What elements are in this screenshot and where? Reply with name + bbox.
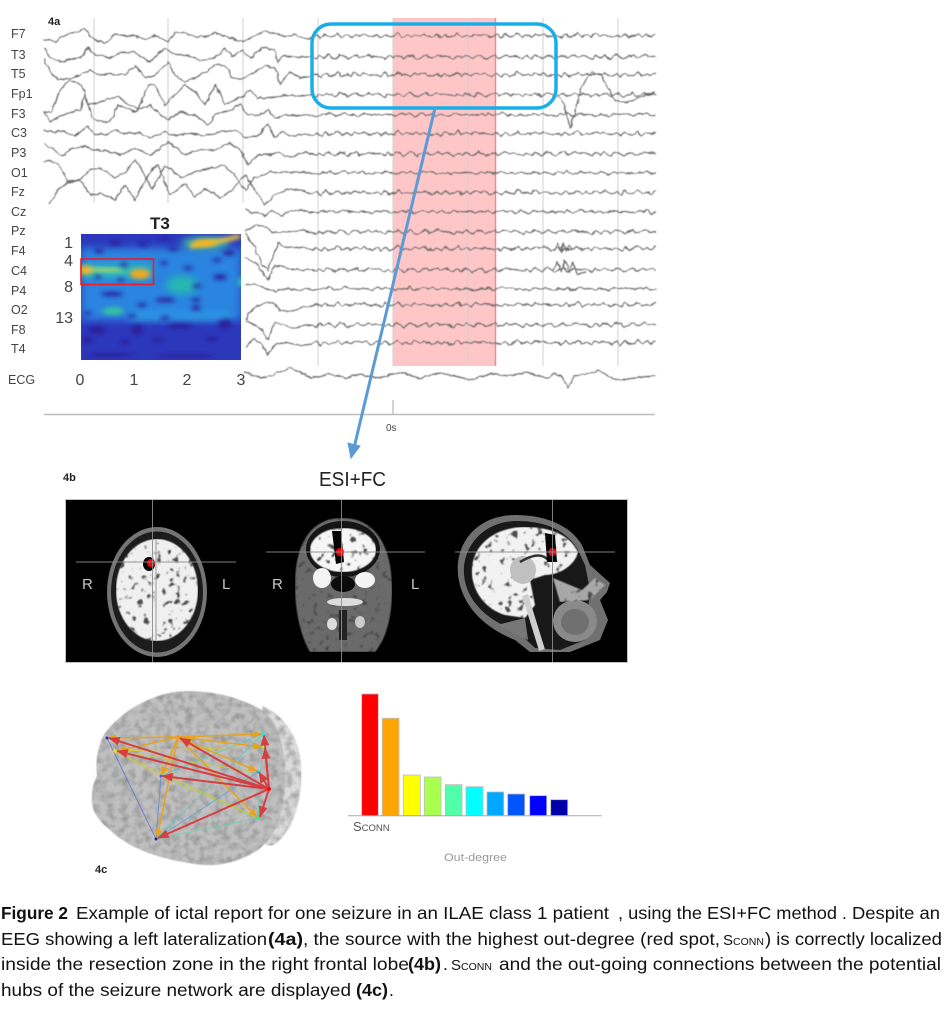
caption line 1: Despite an [852, 903, 940, 923]
panel heading ESI+FC: ESI+FC [319, 469, 386, 491]
heatmap x axis ticks: 1 [130, 372, 139, 389]
caption line 3: inside the resection zone in the right frontal lobe [1, 954, 409, 974]
heatmap x axis ticks: 2 [183, 372, 192, 389]
orientation letters: L [411, 576, 419, 593]
out-degree bar chart [348, 694, 602, 864]
heatmap y axis ticks: 13 [55, 310, 73, 327]
caption line 4: (4c) [356, 980, 388, 1000]
brain surface [262, 706, 301, 846]
chart baseline [348, 815, 602, 817]
panel 4c: brain network diagram [92, 691, 301, 876]
crosshair lines [76, 500, 615, 662]
channel labels: F3 [11, 107, 26, 121]
caption line 1 [1, 903, 940, 923]
channel labels [8, 27, 35, 387]
channel labels: O1 [11, 166, 28, 180]
channel labels: P4 [11, 284, 26, 298]
caption line 2: , the source with the highest out-degree (red spot, [303, 929, 720, 949]
axial slice [107, 527, 207, 657]
channel labels: Cz [11, 205, 26, 219]
red S-CONN outgoing arrows [109, 735, 269, 838]
source red spot [336, 548, 344, 556]
heatmap title: T3 [150, 214, 170, 233]
right channels [311, 32, 658, 348]
channel labels: Fp1 [11, 87, 33, 101]
channel labels: C3 [11, 126, 27, 140]
channel labels: T5 [11, 67, 26, 81]
channel labels: T3 [11, 48, 26, 62]
lesion [143, 557, 155, 571]
bars [362, 694, 568, 816]
caption line 2 [1, 929, 942, 949]
channel labels: F8 [11, 323, 26, 337]
caption line 2: EEG showing a left lateralization [1, 929, 267, 949]
band right edge [494, 18, 496, 366]
panel 4a: EEG recording [8, 16, 707, 434]
channel labels: ECG [8, 373, 35, 387]
caption line 4: . [389, 980, 394, 1000]
heatmap x axis ticks: 3 [237, 372, 246, 389]
heatmap y axis ticks: 8 [64, 279, 73, 296]
orange outgoing arrows [108, 734, 262, 838]
figure caption [1, 903, 942, 1000]
time axis: 0s [386, 423, 397, 434]
channel labels: C4 [11, 264, 27, 278]
caption line 3: SCONN [451, 957, 492, 974]
caption line 3: . [443, 954, 448, 974]
source red spot [147, 559, 155, 567]
channel labels: F7 [11, 27, 26, 41]
heatmap x axis ticks [76, 372, 246, 389]
network nodes [106, 732, 271, 840]
MRI black background [66, 500, 628, 662]
heatmap red selection box [81, 259, 154, 284]
orientation letters: R [82, 576, 93, 593]
panel label 4a: 4a [48, 16, 61, 28]
x axis title: Out-degree [444, 852, 507, 864]
channel labels: F4 [11, 244, 26, 258]
caption line 1: Figure 2 [1, 903, 68, 923]
panel 4b: MRI source localisation [63, 469, 628, 662]
channel labels: Fz [11, 185, 25, 199]
caption line 3: (4b) [408, 954, 441, 974]
heatmap image [79, 234, 244, 360]
channel labels: T4 [11, 342, 26, 356]
EEG channel traces [44, 28, 707, 388]
coronal slice [295, 518, 392, 652]
source red spot [548, 548, 556, 556]
orientation letters [82, 576, 419, 593]
heatmap y axis ticks: 1 [64, 235, 73, 252]
channel labels: P3 [11, 146, 26, 160]
panel label 4c: 4c [95, 864, 107, 876]
left channels [44, 28, 312, 43]
thin connection lines [107, 734, 263, 839]
sagittal slice [458, 515, 610, 652]
heatmap y axis ticks [55, 235, 73, 327]
highlighted seizure onset band [393, 18, 496, 366]
channel labels: Pz [11, 224, 26, 238]
orientation letters: R [272, 576, 283, 593]
orientation letters: L [222, 576, 230, 593]
caption line 2: SCONN [723, 932, 764, 949]
caption line 3 [1, 954, 941, 974]
blue selection rounded box [312, 24, 556, 108]
S-CONN bar label: SCONN [353, 819, 390, 834]
caption line 4: hubs of the seizure network are displayed [1, 980, 351, 1000]
caption line 2: ) is correctly localized [765, 929, 942, 949]
lower channels beside the inset [246, 210, 312, 216]
caption line 1: Example of ictal report for one seizure in an ILAE class 1 patient [76, 903, 609, 923]
panel label 4b: 4b [63, 472, 76, 484]
caption line 1: . [842, 903, 847, 923]
arrow: EEG selection to source imaging [348, 108, 435, 458]
caption line 2: (4a) [268, 929, 303, 949]
caption line 3: and the out-going connections between the potential [499, 954, 941, 974]
channel labels: O2 [11, 303, 28, 317]
inset: T3 time-frequency heatmap [55, 214, 246, 389]
heatmap y axis ticks: 4 [64, 253, 73, 270]
caption line 1: , using the ESI+FC method [618, 903, 837, 923]
heatmap x axis ticks: 0 [76, 372, 85, 389]
grid lines [94, 18, 618, 366]
